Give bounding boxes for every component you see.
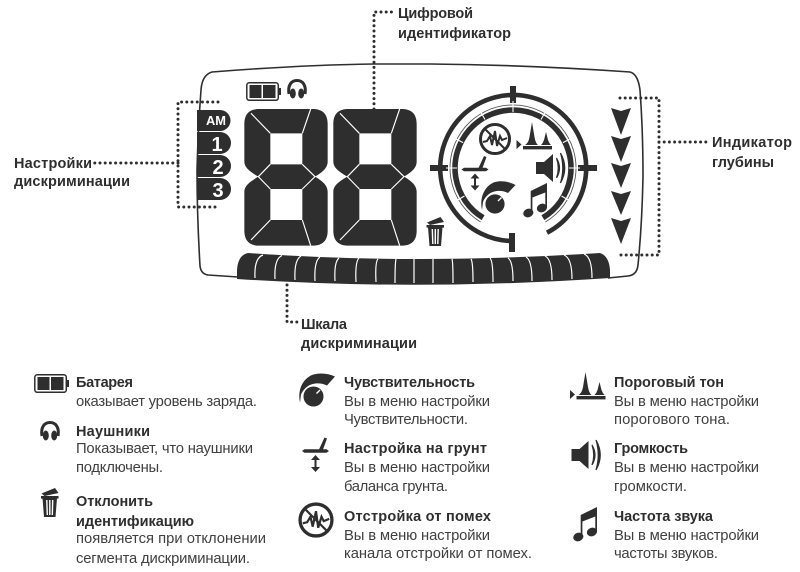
callout: discrimination settings: Настройки [14,156,92,172]
legend: reject identification: идентификацию [76,514,194,530]
legend: headphones [42,422,253,476]
digital identifier: two seven-segment digits [244,109,417,246]
discrimination settings: AM 1 2 3: AM [206,113,226,128]
legend icon: ground balance [302,438,329,472]
legend: threshold tone: Вы в меню настройки [614,394,759,410]
legend: volume: Громкость [614,441,688,457]
legend icon: headphones [42,422,58,440]
discrimination scale bar [237,253,610,285]
callout: depth indicator: глубины [712,155,774,171]
icon: noise cancel [480,124,510,154]
display outline [197,64,643,278]
legend: reject identification: появляется при отклонении [76,531,266,547]
icon: sensitivity knob [481,181,516,214]
legend: noise cancel: Отстройка от помех [344,509,491,525]
legend icon: volume speaker [572,440,600,470]
callout: digital identifier: идентификатор [398,26,511,42]
callout: discrimination scale: Шкала [301,317,348,333]
icon: reject trash can [426,217,444,246]
icon: volume speaker [536,153,565,183]
digit one [244,109,328,246]
icon: music note [522,183,548,219]
legend icon: battery [35,375,69,392]
icon: battery [247,83,281,100]
legend: battery: Батарея [76,375,133,391]
legend: sensitivity: Чувствительности. [344,412,468,428]
discrimination settings: AM 1 2 3: 1 [211,134,223,156]
callout: digital identifier [374,6,511,109]
discrimination settings: AM 1 2 3: 2 [212,157,224,179]
discrimination settings: AM 1 2 3 [197,110,231,202]
legend: ground balance: баланса грунта. [344,479,448,495]
gauge: circular dial [430,86,597,252]
callout: digital identifier: Цифровой [398,6,473,22]
legend icon: noise cancel [300,504,332,536]
legend: volume: громкости. [614,479,687,495]
legend icon: music note [572,507,598,543]
legend: headphones: подключены. [76,460,163,476]
legend: sensitivity: Вы в меню настройки [344,394,490,410]
legend: threshold tone: Пороговый тон [614,375,724,391]
callout: depth indicator: Индикатор [712,135,792,151]
icon: threshold tone [516,122,552,149]
legend: sound frequency: Частота звука [614,509,714,525]
callout: discrimination scale: дискриминации [301,336,417,352]
legend: ground balance: Вы в меню настройки [344,460,490,476]
legend: noise cancel: канала отстройки от помех. [344,546,532,562]
legend: sound frequency [572,507,759,562]
callout: depth indicator [620,98,792,255]
legend icon: sensitivity knob [299,373,335,406]
legend icon: trash can [41,488,58,517]
callout: discrimination settings: дискриминации [14,174,130,190]
legend: battery [35,375,257,410]
depth indicator arrows [611,108,631,244]
legend: sound frequency: Вы в меню настройки [614,528,759,544]
legend: volume [572,440,759,495]
legend: threshold tone: порогового тона. [614,412,730,428]
legend: threshold tone [570,372,759,428]
legend: noise cancel [300,504,532,562]
icon: ground balance [462,156,488,190]
legend: reject identification: Отклонить [76,494,153,510]
icon: headphones [289,80,305,98]
legend: ground balance [302,438,490,495]
legend: battery: оказывает уровень заряда. [76,394,257,410]
legend: ground balance: Настройка на грунт [344,441,487,457]
legend: headphones: Показывает, что наушники [76,441,253,457]
legend: reject identification [41,488,266,567]
panel: LCD display [197,64,643,285]
callout: discrimination settings [14,102,218,207]
legend: sound frequency: частоты звуков. [614,546,718,562]
legend icon: threshold tone [570,372,606,399]
callout: discrimination scale [287,285,417,352]
legend: sensitivity: Чувствительность [344,375,475,391]
digit two [333,109,417,246]
legend: reject identification: сегмента дискриминации. [76,551,250,567]
legend: headphones: Наушники [76,424,150,440]
discrimination settings: AM 1 2 3: 3 [212,180,224,202]
legend: noise cancel: Вы в меню настройки [344,528,490,544]
legend: sensitivity [299,373,490,428]
legend: volume: Вы в меню настройки [614,460,759,476]
